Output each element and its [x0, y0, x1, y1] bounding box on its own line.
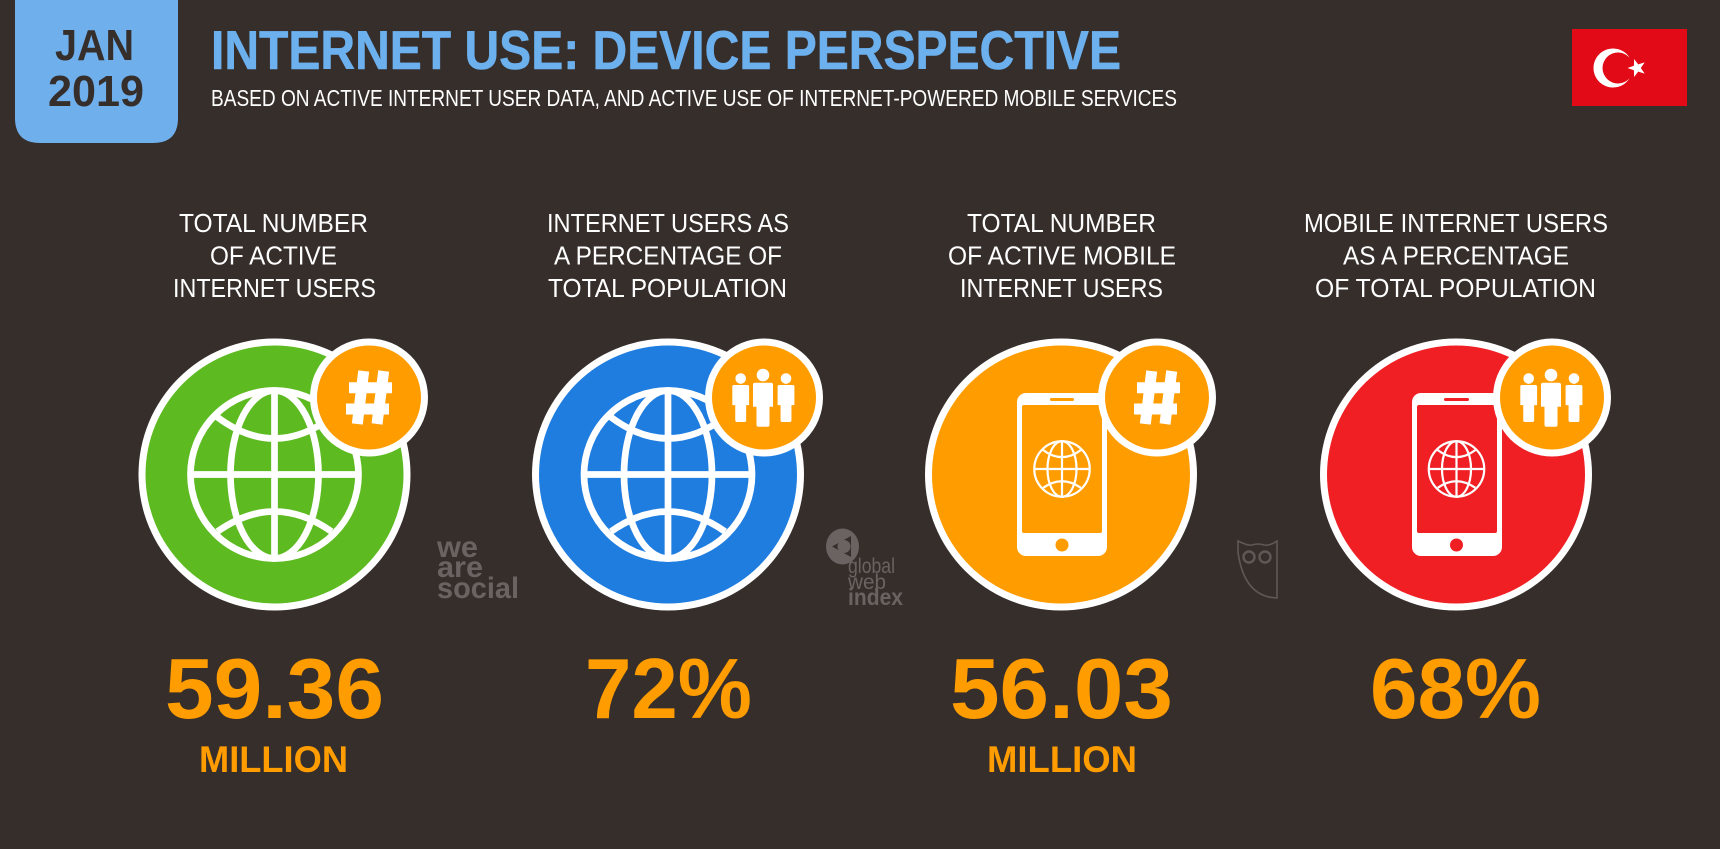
label: mobile internet users as percentage: OF TOTAL POPULATION — [1315, 273, 1596, 303]
label: total active mobile internet users — [948, 208, 1176, 303]
unit: million: MILLION — [987, 739, 1137, 780]
logo: global web index: web — [847, 571, 886, 594]
icon: people badge — [1493, 338, 1611, 456]
icon: green globe circle — [138, 338, 410, 610]
label: total active internet users: TOTAL NUMBER — [179, 208, 368, 238]
icon: number badge — [310, 338, 428, 456]
icon: Turkish flag — [1572, 29, 1687, 106]
label: total active mobile internet users: TOTAL NUMBER — [967, 208, 1156, 238]
value: 59.36: 59.36 — [165, 642, 384, 737]
panel: active mobile internet users — [925, 208, 1216, 780]
logo: global web index: global — [848, 555, 895, 578]
unit: million: MILLION — [199, 739, 348, 780]
label: total active internet users: INTERNET USERS — [173, 273, 376, 303]
label: internet users as percentage: TOTAL POPULATION — [548, 273, 787, 303]
label: total active mobile internet users: INTERNET USERS — [960, 273, 1163, 303]
logo: we are social — [436, 531, 519, 605]
logo: global web index: index — [848, 584, 903, 610]
label: mobile internet users as percentage: AS A PERCENTAGE — [1343, 240, 1569, 270]
icon: blue globe circle — [532, 338, 804, 610]
label: internet users as percentage — [547, 208, 789, 303]
icon: red phone circle — [1320, 338, 1592, 610]
logo: global web index — [826, 528, 903, 610]
date tab — [15, 0, 178, 143]
logo: we are social: we — [436, 531, 478, 564]
value: 72%: 72% — [585, 642, 752, 737]
label: mobile internet users as percentage: MOBILE INTERNET USERS — [1304, 208, 1608, 238]
panel: active internet users — [138, 208, 428, 780]
date tab: JAN — [55, 21, 134, 70]
title: INTERNET USE: DEVICE PERSPECTIVE — [211, 19, 1121, 81]
panel: mobile internet users percentage — [1304, 208, 1611, 737]
label: internet users as percentage: A PERCENTAGE OF — [554, 240, 782, 270]
subtitle: BASED ON ACTIVE INTERNET USER DATA, AND ACTIVE USE OF INTERNET-POWERED MOBILE SERVICES — [211, 85, 1177, 111]
icon: orange phone circle — [925, 338, 1197, 610]
label: total active mobile internet users: OF ACTIVE MOBILE — [948, 240, 1176, 270]
label: internet users as percentage: INTERNET USERS AS — [547, 208, 789, 238]
label: total active internet users — [173, 208, 376, 303]
icon: number badge — [1098, 338, 1216, 456]
value: 68%: 68% — [1370, 642, 1541, 737]
label: mobile internet users as percentage — [1304, 208, 1608, 303]
logo: owl — [1238, 541, 1277, 598]
logo: we are social: are — [437, 551, 483, 584]
logo: we are social: social — [437, 572, 519, 605]
panel: internet users percentage — [532, 208, 823, 737]
date tab: 2019 — [48, 67, 144, 116]
icon: people badge — [705, 338, 823, 456]
value: 56.03: 56.03 — [950, 642, 1173, 737]
label: total active internet users: OF ACTIVE — [210, 240, 337, 270]
